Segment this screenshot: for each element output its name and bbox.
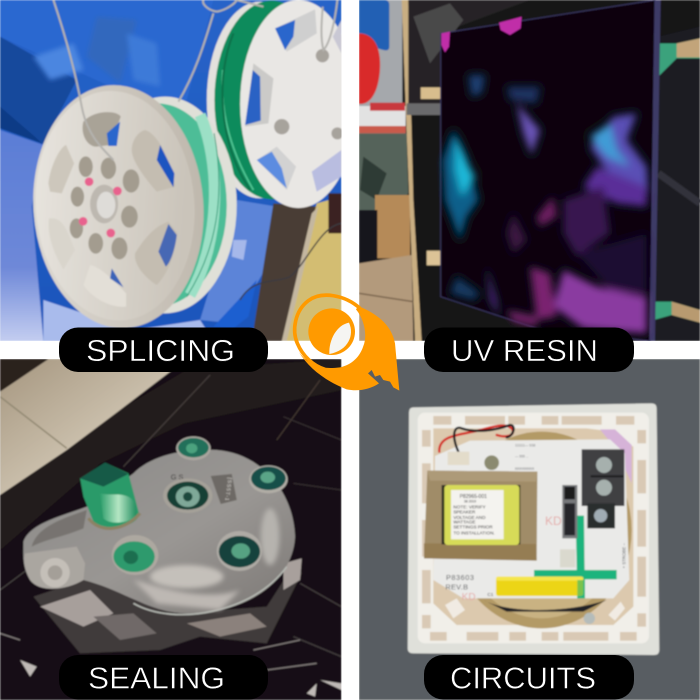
compressor head body: G S (171, 472, 183, 481)
plastic mounting plate (408, 403, 659, 655)
wooden post (240, 193, 341, 341)
dark resin panel (441, 0, 661, 341)
red and black speaker wires (439, 425, 514, 452)
transformer label: 38 2019 (464, 500, 476, 504)
white circuit board: RRRRRRRR (515, 467, 535, 471)
bolt (40, 558, 70, 587)
yellow capacitor: C1 (487, 592, 494, 597)
logo: roll opening (329, 323, 351, 354)
white circuit board: KD (462, 592, 476, 603)
transformer label: NOTE: VERIFY (453, 505, 486, 510)
label: circuits (424, 655, 634, 700)
label: UV resin: UV RESIN (451, 333, 598, 368)
green tape traces (534, 516, 617, 598)
grey backdrop (359, 359, 700, 700)
white circuit board: P83603 (446, 573, 474, 582)
transformer label: VOLTAGE AND (453, 515, 486, 520)
green sealed ports (112, 436, 288, 575)
transformer label: WATTAGE (453, 520, 476, 525)
transformer label: SPEAKER (453, 510, 476, 515)
white circuit board: KD (545, 514, 562, 528)
small connector (560, 549, 575, 567)
pink drips (499, 17, 522, 35)
white circuit board: REV.B (445, 582, 468, 591)
hanging wires (53, 0, 337, 160)
label: sealing: SEALING (88, 660, 225, 696)
label: splicing: SPLICING (86, 333, 235, 368)
dark surface and tile floor (0, 359, 341, 700)
green sealed fitting (80, 463, 140, 528)
label: circuits: CIRCUITS (450, 660, 596, 696)
screw terminal block (582, 449, 624, 528)
jumper block (562, 485, 577, 538)
transformer label: TO INSTALLATION. (453, 530, 495, 535)
white circuit board: — 555 ... (515, 454, 529, 458)
label: UV resin (424, 328, 634, 372)
foil wrap (0, 558, 341, 697)
nameplate tag (211, 474, 237, 504)
reel windows (48, 112, 177, 307)
second reel with green wire (207, 0, 357, 208)
transformer label: SETTINGS PRIOR (453, 525, 493, 530)
panel: UV resin photo of swirled panel (359, 0, 700, 341)
resin swirls (443, 75, 648, 333)
wire connector (448, 452, 469, 465)
workshop background (359, 0, 700, 341)
compressor head body (23, 450, 295, 615)
reel hub (90, 185, 118, 223)
panel: sealing photo of coated compressor (0, 359, 342, 700)
white circuit board: 111111— SS8 (515, 444, 536, 448)
logo: orange tape roll (295, 295, 399, 391)
transformer (424, 471, 537, 561)
reel lug holes (70, 156, 139, 259)
label: splicing (59, 328, 268, 372)
panel: splicing photo of wire reels (0, 0, 342, 341)
pink markers (79, 177, 122, 237)
panel: circuits photo of speaker board (359, 359, 700, 700)
strobe polarity label: + STROBE − (621, 543, 626, 568)
label: sealing (59, 655, 268, 700)
nameplate tag: [SS5T-1 (223, 477, 232, 501)
transformer label: P82965-001 (460, 494, 487, 500)
yellow capacitor (487, 577, 585, 598)
transformer label (451, 490, 504, 539)
white circuit board (433, 439, 629, 603)
second reel windows (245, 9, 341, 192)
blue tarp background (0, 0, 341, 341)
first reel with teal wire (25, 79, 237, 334)
